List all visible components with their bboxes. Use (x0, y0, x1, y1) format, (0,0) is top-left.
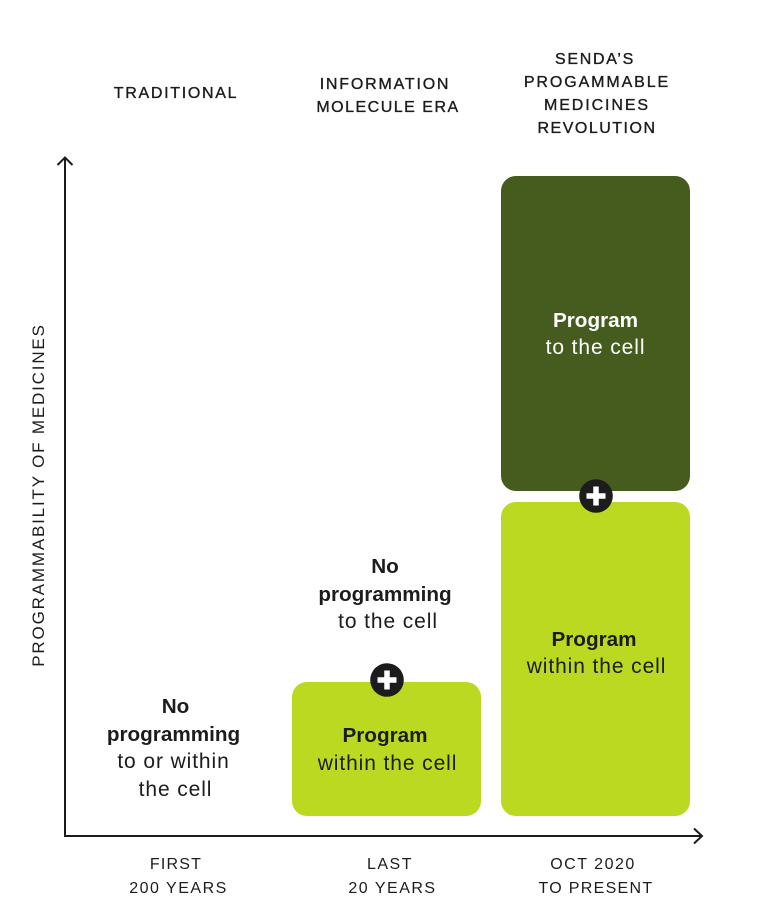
text: program within the cell, era 2 (318, 724, 457, 774)
heading: traditional: TRADITIONAL (114, 85, 238, 102)
box: program within the cell, era 2 (292, 682, 481, 816)
x-axis label: last 20 years (348, 856, 437, 897)
heading: information molecule era (316, 76, 460, 116)
icon: plus, Senda (579, 479, 613, 513)
heading: Senda's programmable medicines revolution: SENDA’S (555, 50, 635, 68)
text: no programming to the cell: programming (318, 582, 452, 606)
x-axis label: first 200 years: FIRST (150, 856, 202, 873)
text: no programming to or within the cell: to or within (117, 750, 230, 773)
heading: information molecule era: INFORMATION (320, 76, 450, 93)
y-axis label: PROGRAMMABILITY OF MEDICINES (29, 323, 48, 667)
text: program within the cell, Senda (526, 628, 666, 678)
heading: Senda's programmable medicines revolution: REVOLUTION (537, 120, 656, 136)
text: program within the cell, era 2: Program (342, 724, 428, 747)
x-axis label: first 200 years: 200 YEARS (129, 880, 228, 897)
text: no programming to the cell (318, 555, 452, 633)
x-axis label: Oct 2020 to present (538, 856, 653, 897)
heading: Senda's programmable medicines revolution: MEDICINES (544, 96, 650, 114)
text: program to the cell (546, 308, 645, 359)
text: no programming to or within the cell: No (162, 695, 189, 718)
text: program within the cell, Senda: within the cell (527, 655, 666, 678)
x-axis label: last 20 years: LAST (367, 856, 413, 873)
text: program to the cell: to the cell (546, 336, 645, 359)
text: no programming to or within the cell: programming (107, 722, 240, 746)
heading: Senda's programmable medicines revolution: PROGAMMABLE (524, 74, 670, 90)
box: program to the cell (501, 176, 690, 491)
text: program within the cell, Senda: Program (551, 628, 637, 650)
text: program within the cell, era 2: within the cell (318, 752, 457, 774)
text: no programming to or within the cell (107, 695, 240, 800)
heading: Senda's programmable medicines revolution (524, 50, 670, 136)
x-axis label: first 200 years (129, 856, 228, 897)
x-axis label: Oct 2020 to present: TO PRESENT (539, 880, 653, 897)
text: program to the cell: Program (553, 308, 638, 332)
heading: information molecule era: MOLECULE ERA (316, 99, 460, 116)
icon: plus, era 2 (370, 663, 404, 697)
text: no programming to the cell: to the cell (338, 610, 438, 633)
box: program within the cell, Senda (501, 502, 690, 816)
text: no programming to the cell: No (371, 555, 399, 578)
x-axis label: last 20 years: 20 YEARS (348, 880, 437, 897)
text: no programming to or within the cell: the cell (139, 778, 212, 800)
x-axis label: Oct 2020 to present: OCT 2020 (550, 856, 636, 873)
